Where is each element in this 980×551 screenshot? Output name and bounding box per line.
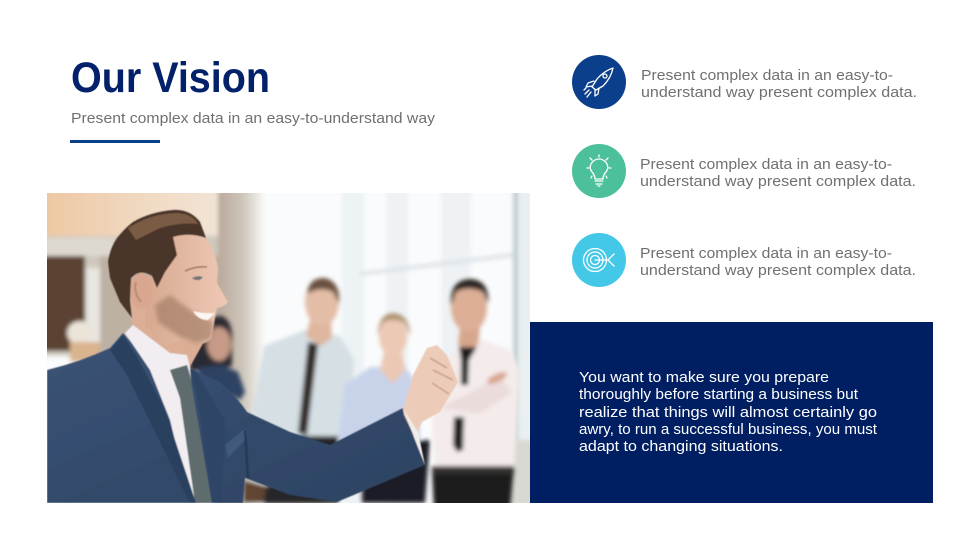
icon: light bulb (572, 144, 626, 198)
jacket (47, 333, 425, 503)
fist (403, 345, 458, 438)
background colleagues (188, 278, 520, 510)
title underline (70, 140, 160, 143)
panel text: realize that things will almost certainly go (579, 405, 877, 421)
text: point one: understand way present complex data. (641, 84, 917, 101)
ear (130, 272, 150, 307)
photo: business team (40, 186, 540, 511)
shirt (125, 325, 200, 503)
smile (193, 311, 215, 320)
lapels (110, 335, 196, 503)
face (145, 235, 228, 345)
text: point three: understand way present complex data. (640, 262, 916, 279)
tie (170, 365, 212, 503)
hair (108, 210, 206, 318)
neck (130, 298, 205, 372)
subtitle: Present complex data in an easy-to-understand way (71, 110, 436, 127)
text: point three (640, 245, 916, 279)
text: point three: Present complex data in an easy-to- (640, 245, 892, 262)
text: point two (640, 156, 916, 190)
icon: target (572, 233, 626, 287)
stubble (155, 295, 213, 344)
arm crease (245, 430, 248, 478)
cuff (403, 408, 425, 465)
title: Our Vision (71, 54, 270, 102)
panel: business advice (530, 322, 933, 503)
pocket (225, 428, 247, 458)
photo background (40, 186, 540, 511)
panel text (579, 370, 877, 455)
panel text: thoroughly before starting a business but (579, 387, 858, 403)
colleague left (252, 278, 354, 503)
presenter (47, 210, 458, 503)
panel text: awry, to run a successful business, you must (579, 422, 877, 438)
panel text: adapt to changing situations. (579, 439, 783, 455)
icon: rocket (572, 55, 626, 109)
text: point two: Present complex data in an easy-to- (640, 156, 892, 173)
woman behind (188, 316, 245, 400)
eye and brow (192, 276, 203, 280)
colleague centre (338, 313, 430, 503)
text: point one: Present complex data in an easy-to- (641, 67, 893, 84)
text: point two: understand way present complex data. (640, 173, 916, 190)
panel text: You want to make sure you prepare (579, 370, 829, 386)
colleague right (432, 279, 520, 510)
text: point one (641, 67, 917, 101)
